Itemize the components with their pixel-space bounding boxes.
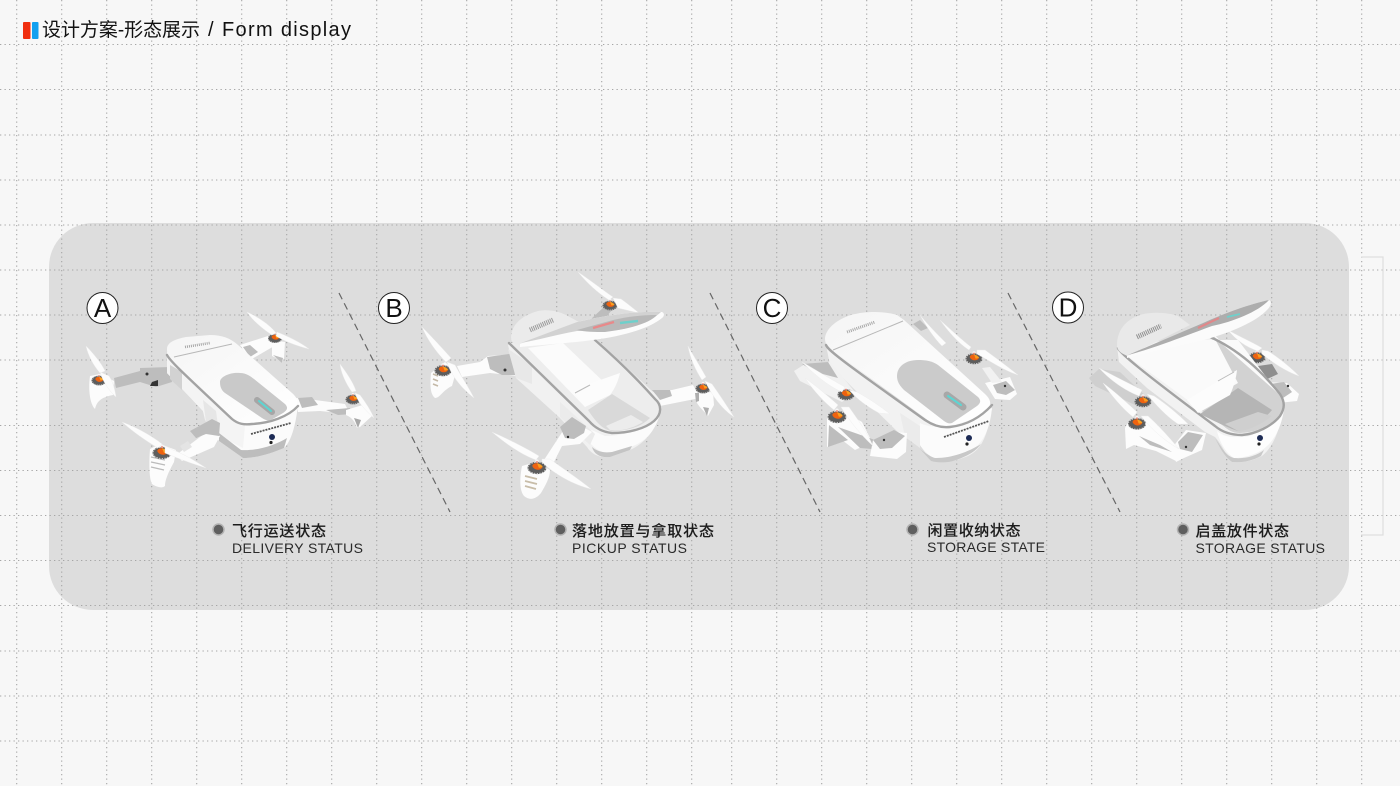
caption B: PICKUP STATUS [572, 540, 687, 556]
status light [947, 395, 963, 407]
caption D: STORAGE STATUS [1196, 540, 1325, 556]
badge A [87, 292, 118, 324]
right bracket frame [1361, 257, 1383, 535]
divider [1187, 370, 1237, 413]
title: / [208, 19, 214, 41]
title: 设计方案-形态展示 [42, 19, 200, 41]
panel: form display band [49, 223, 1349, 610]
camera [965, 435, 972, 446]
camera [1257, 435, 1263, 446]
lid [825, 312, 990, 426]
divider [573, 373, 620, 407]
caption A: DELIVERY STATUS [232, 540, 363, 556]
lid [167, 335, 297, 423]
divider: C to D [1008, 293, 1120, 512]
drone C: storage state [794, 312, 1018, 462]
lid inset [220, 373, 287, 420]
lid inset [897, 360, 980, 423]
arm and rotor: right [296, 364, 374, 428]
body shell [1117, 300, 1284, 462]
arm and rotor: right [650, 346, 734, 417]
camera [269, 434, 275, 444]
badge D [1052, 292, 1084, 323]
caption B [555, 522, 714, 556]
body shell [508, 310, 664, 457]
open lid [520, 312, 664, 347]
badge C [756, 292, 788, 324]
body [825, 312, 992, 462]
arm and rotor: front [122, 419, 220, 487]
rear lid base [511, 310, 579, 345]
lid lights [1198, 318, 1219, 328]
badge C: C [763, 293, 781, 323]
cargo bay [510, 338, 660, 433]
body print [251, 423, 291, 434]
body [167, 335, 298, 458]
divider: A to B [339, 293, 450, 512]
cargo bay [1119, 340, 1283, 433]
drone D: open storage state [1089, 300, 1299, 462]
caption C: 闲置收纳状态 [928, 522, 1020, 540]
arm and rotor: rear [578, 272, 639, 324]
rear lid base [1117, 313, 1190, 356]
caption A [213, 522, 363, 556]
title icon [23, 22, 38, 39]
caption B: 落地放置与拿取状态 [572, 522, 714, 540]
arm and rotor: front [492, 417, 592, 499]
folded rotors: left cluster [1089, 368, 1206, 462]
title [42, 19, 351, 41]
folded rotors: rear right [913, 315, 1018, 400]
divider: B to C [710, 293, 820, 512]
badge B [378, 292, 410, 324]
body print [944, 421, 989, 437]
status light [257, 400, 272, 412]
badge D: D [1059, 292, 1077, 322]
open lid [1127, 300, 1271, 358]
caption C [907, 522, 1045, 555]
arm and rotor: left [86, 346, 172, 409]
badge B: B [385, 293, 403, 323]
caption A: 飞行运送状态 [232, 522, 326, 540]
arm and rotor: rear right [240, 312, 309, 363]
caption D: 启盖放件状态 [1196, 522, 1289, 540]
caption D [1178, 522, 1325, 556]
drone A: delivery state [86, 312, 374, 487]
folded rotors: rear right [1213, 330, 1299, 403]
folded rotors: left cluster [794, 362, 907, 459]
caption C: STORAGE STATE [927, 539, 1045, 555]
arm and rotor: left [422, 327, 518, 398]
title: Form display [222, 19, 351, 41]
lid lights [593, 322, 614, 328]
drone B: pickup state [422, 272, 734, 499]
badge A: A [94, 293, 112, 323]
